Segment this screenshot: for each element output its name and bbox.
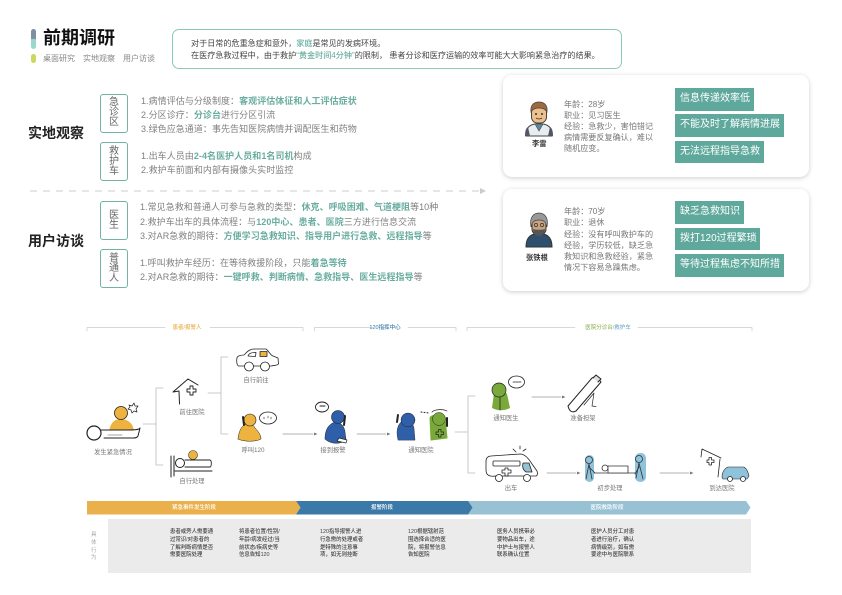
icon: arrival at hospital xyxy=(701,449,749,482)
step label: 准备担架 xyxy=(570,415,596,422)
icon: notifying hospital xyxy=(397,410,447,440)
behaviour text xyxy=(320,528,363,558)
behaviour text: 120根据辖射范 xyxy=(408,529,444,535)
behaviour text: 者进行治疗，确认 xyxy=(591,537,634,543)
icon: ambulance xyxy=(486,446,537,482)
icon: self treatment in bed xyxy=(171,450,212,477)
pain point: 无法远程指导急救 xyxy=(680,146,760,156)
ambulance findings: 2.救护车前面和内部有摄像头实时监控 xyxy=(141,165,293,175)
behaviour text: 医护人员分工对患 xyxy=(591,529,634,535)
persona details: Zhang Tiegen: 职业：退休 xyxy=(564,218,604,227)
intro callout xyxy=(172,29,622,69)
behaviour panel xyxy=(108,519,751,573)
stage name: hospital rescue: 医院救助阶段 xyxy=(590,505,624,511)
persona details: Zhang Tiegen: 经验：没有呼叫救护车的 xyxy=(564,230,653,238)
behaviour text: 信息告知120 xyxy=(239,552,270,558)
behaviour text: 联系确认位置 xyxy=(497,552,529,558)
ordinary people findings: 1.呼叫救护车经历：在等待救援阶段，只能着急等待 xyxy=(140,258,347,268)
pain point: 等待过程焦虑不知所措 xyxy=(680,259,780,270)
behaviour text xyxy=(408,528,446,558)
step label: 通知医院 xyxy=(408,447,434,454)
behaviour text: 120指导报警人进 xyxy=(320,529,361,535)
intro callout: 在医疗急救过程中，由于救护“黄金时间4分钟”的限制， 患者分诊和医疗运输的效率可能大大影响紧急治疗的结果。 xyxy=(191,51,600,60)
icon: dispatcher xyxy=(316,402,347,443)
tag: doctor: 医 xyxy=(109,210,119,220)
behaviour text: 要物品出车，途 xyxy=(497,537,535,543)
ordinary people findings: 2.对AR急救的期待：一键呼救、判断病情、急救指导、医生远程指导等 xyxy=(140,272,423,282)
step label: 到达医院 xyxy=(709,485,735,492)
row label: specific behaviour: 具体行为 xyxy=(91,532,97,561)
tag: doctor xyxy=(100,201,128,240)
stage label: dispatch centre: 120指挥中心 xyxy=(369,325,401,331)
behaviour text: 项，如无则挂断 xyxy=(320,552,358,558)
persona details: Zhang Tiegen: 年龄：70岁 xyxy=(564,207,605,216)
doctor findings: 2.救护车出车的具体流程：与120中心、患者、医院三方进行信息交流 xyxy=(140,216,416,226)
tag: ambulance: 护 xyxy=(109,156,119,166)
behaviour text: 病情级别，如有需 xyxy=(591,545,634,551)
behaviour text xyxy=(239,528,280,558)
stage name: alarm: 报警阶段 xyxy=(371,505,393,511)
persona name: Zhang Tiegen: 张铁根 xyxy=(526,253,548,262)
behaviour text: 院，将报警信息 xyxy=(408,545,446,551)
pain point: 拨打120过程繁琐 xyxy=(680,232,757,244)
behaviour text: 将患者位置/性别/ xyxy=(239,529,280,535)
tag: ambulance: 车 xyxy=(109,166,119,176)
behaviour text: 前状态/疾病史等 xyxy=(239,545,278,551)
step label: 自行处理 xyxy=(179,478,205,485)
pain point xyxy=(675,228,760,250)
tag: ambulance xyxy=(100,142,128,181)
flow arrows xyxy=(283,396,694,474)
title: 前期调研 xyxy=(43,28,115,48)
persona details: Li Lei: 经验：急救少，害怕错记 xyxy=(564,122,653,130)
emergency room findings xyxy=(141,96,357,134)
step label: 通知医生 xyxy=(493,415,519,422)
stage arrow: emergency stage xyxy=(87,501,300,514)
emergency room findings: 3.绿色应急通道：事先告知医院病情并调配医生和药物 xyxy=(141,124,357,134)
emergency room findings: 2.分区诊疗：分诊台进行分区引流 xyxy=(141,110,275,120)
behaviour text: 围选择合适的医 xyxy=(408,537,446,543)
persona card: Li Lei xyxy=(503,75,809,177)
step label: 初步处理 xyxy=(597,485,623,492)
persona details: Li Lei: 年龄：28岁 xyxy=(564,100,605,108)
behaviour text xyxy=(591,528,634,558)
tag: emergency room: 区 xyxy=(109,117,119,128)
ambulance findings: 1.出车人员由2-4名医护人员和1名司机构成 xyxy=(141,151,312,161)
persona details: Zhang Tiegen: 情况下容易急躁焦虑。 xyxy=(564,263,645,272)
persona details: Zhang Tiegen xyxy=(564,207,653,272)
persona card: Zhang Tiegen xyxy=(503,189,809,291)
icon: hospital house xyxy=(173,379,198,404)
tag: emergency room: 诊 xyxy=(109,107,119,118)
pain point: 不能及时了解病情进展 xyxy=(680,119,780,130)
subtitle: 桌面研究 实地观察 用户访谈 xyxy=(43,54,155,63)
tag: ordinary people: 普 xyxy=(109,252,119,264)
doctor findings: 1.常见急救和普通人可参与急救的类型：休克、呼吸困难、气道梗阻等10种 xyxy=(140,202,438,212)
tag: ordinary people: 人 xyxy=(109,272,119,284)
pain point xyxy=(675,88,754,110)
tag: ordinary people: 通 xyxy=(109,262,119,274)
pain point xyxy=(675,254,784,276)
behaviour text: 告知医院 xyxy=(408,552,430,558)
persona details: Li Lei xyxy=(564,100,653,153)
behaviour text: 年龄/病发经过/当 xyxy=(239,537,280,543)
behaviour text xyxy=(497,528,535,558)
icon: person collapsed with helper xyxy=(87,403,140,440)
step label: 发生紧急情况 xyxy=(94,449,132,456)
pain point xyxy=(675,140,764,163)
icon: stretcher xyxy=(568,375,601,412)
pain point xyxy=(675,201,744,224)
pain point xyxy=(675,114,784,136)
stage arrow: hospital stage xyxy=(467,501,750,514)
step label: 出车 xyxy=(505,485,517,492)
persona name: Li Lei: 李雷 xyxy=(532,139,547,148)
behaviour text: 过常识/对患者的 xyxy=(170,537,209,543)
pain point: 缺乏急救知识 xyxy=(680,206,740,217)
behaviour text: 患者或旁人需要通 xyxy=(170,529,213,535)
doctor findings xyxy=(140,202,438,241)
tag: ambulance: 救 xyxy=(109,146,119,156)
step label: 前往医院 xyxy=(179,409,205,416)
tag: doctor: 生 xyxy=(109,220,119,230)
behaviour text: 是特殊的注意事 xyxy=(320,545,358,551)
persona details: Zhang Tiegen: 救知识和急救经验，紧急 xyxy=(564,252,653,261)
heading: field observation: 实地观察 xyxy=(28,125,84,141)
persona details: Li Lei: 职业：见习医生 xyxy=(564,110,621,120)
stage arrow: alarm stage xyxy=(296,501,472,514)
step label: 呼叫120 xyxy=(241,447,265,454)
behaviour text: 医务人员携带必 xyxy=(497,529,535,535)
stage name: emergency: 紧急事件发生阶段 xyxy=(172,505,216,511)
tag: emergency room: 急 xyxy=(109,97,119,108)
persona details: Li Lei: 病情需要反复确认，难以 xyxy=(564,133,653,142)
icon: car xyxy=(237,349,278,371)
persona details: Li Lei: 随机应变。 xyxy=(564,144,604,153)
heading: user interviews: 用户访谈 xyxy=(28,233,84,249)
dashed divider arrow xyxy=(30,188,486,194)
icon: caller xyxy=(238,412,276,441)
icon: notifying doctor xyxy=(492,376,524,410)
icon: elderly man xyxy=(526,212,552,248)
stage brackets xyxy=(87,328,752,331)
stage label: patient: 患者/报警人 xyxy=(172,325,202,331)
behaviour text: 中护士与报警人 xyxy=(497,545,535,551)
connectors xyxy=(143,357,475,473)
behaviour text: 需要医院处理 xyxy=(170,552,202,558)
icon: young doctor xyxy=(525,102,553,136)
doctor findings: 3.对AR急救的期待：方便学习急救知识、指导用户进行急救、远程指导等 xyxy=(140,231,432,241)
tag: emergency room xyxy=(100,94,128,132)
intro callout: 对于日常的危重急症和意外，家庭是常见的发病环境。 xyxy=(191,38,385,48)
icon: paramedics with patient xyxy=(585,453,646,482)
behaviour text: 要途中与医院联系 xyxy=(591,552,634,558)
step label: 自行前往 xyxy=(243,377,269,384)
ordinary people findings xyxy=(140,258,423,282)
emergency room findings: 1.病情评估与分级制度：客观评估体征和人工评估症状 xyxy=(141,96,357,106)
ambulance findings xyxy=(141,151,312,175)
behaviour text: 了解判断病情是否 xyxy=(170,545,213,551)
step label: 接到报警 xyxy=(320,447,346,454)
behaviour text xyxy=(170,528,213,558)
title marker xyxy=(31,29,36,63)
pain point: 信息传递效率低 xyxy=(680,93,750,104)
behaviour text: 行急需的处理或者 xyxy=(320,537,363,543)
stage label: hospital: 医院分诊台/救护车 xyxy=(585,325,631,331)
tag: ordinary people xyxy=(100,249,128,288)
persona details: Zhang Tiegen: 经验，学历较低，缺乏急 xyxy=(564,240,653,250)
